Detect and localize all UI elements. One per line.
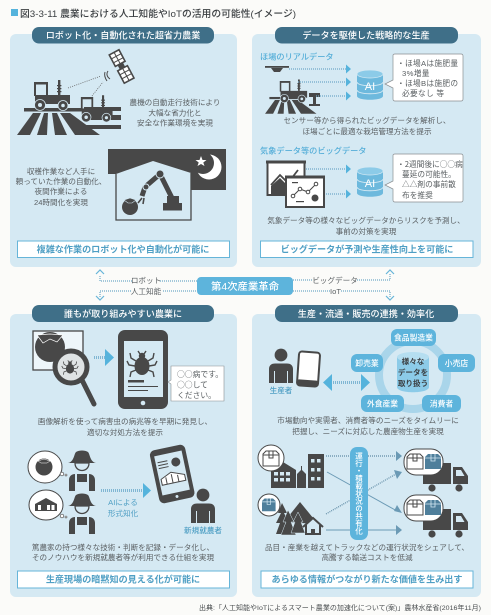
text: weather risk: 気象データ等の様々なビッグデータからリスクを予測し、 (267, 215, 465, 225)
result box: new value: あらゆる情報がつながり新たな価値を生み出す (272, 574, 462, 584)
section heading: weather big data: 気象データ等のビッグデータ (260, 146, 366, 156)
arrow: analysis to phone (94, 349, 114, 366)
icon: data store: 様々な (402, 356, 425, 366)
labels: big data and IoT (312, 275, 358, 296)
labels: big data and IoT: IoT (330, 287, 341, 296)
heading: data production: データを駆使した戦略的な生産 (302, 30, 430, 40)
icon: city buildings with parcel (258, 445, 324, 488)
title: 図3-3-11 農業における人工知能やIoTの活用の可能性(イメージ) (20, 8, 296, 20)
heading: accessible farming (32, 305, 214, 322)
label: industrial revolution pill: 第4次産業革命 (211, 280, 280, 293)
callout: disease forecast: 蔓延の可能性。 (402, 169, 456, 180)
callout: field recommendations: ・ほ場Aは施肥量 (397, 58, 458, 68)
result box: tacit knowledge (18, 571, 230, 588)
node: wholesale: 卸売業 (355, 358, 379, 368)
text: shared logistics (265, 542, 469, 562)
text: know-how: そのノウハウを新規就農者等が利用できる仕組を実現 (32, 552, 214, 562)
arrows: right connector (293, 270, 394, 300)
heading: accessible farming: 誰もが取り組みやすい農業に (64, 308, 182, 319)
text: night-time harvesting: 夜間作業による (35, 186, 87, 196)
labels: big data and IoT: ビッグデータ (312, 275, 358, 285)
arrows: left connector (96, 270, 197, 300)
callout: diagnosis message: ○○病です。 (177, 369, 223, 380)
icon: AI database (357, 70, 383, 100)
icon: data store: 取り扱う (398, 378, 428, 388)
label: AI formalization: 形式知化 (108, 508, 139, 518)
icon: producer with tablet (269, 349, 320, 387)
text: weather risk (267, 215, 465, 236)
icon: smartphone with pest (118, 330, 168, 409)
icon: fields and tractors (17, 80, 121, 135)
center: fourth industrial revolution connector (96, 270, 394, 300)
labels: robot and AI: ロボット (131, 276, 161, 285)
text: image analysis: 適切な対処方法を提示 (87, 427, 163, 437)
text: know-how: 篤農家の持つ様々な技術・判断を記録・データ化し、 (32, 542, 214, 552)
text: market needs: 把握し、ニーズに対応した農産物生産を実現 (292, 426, 444, 436)
text: autonomous machinery: 安全な作業環境を実現 (137, 118, 213, 128)
node: food manufacturing: 食品製造業 (394, 332, 433, 342)
heading: coordination (275, 305, 458, 322)
node: consumers: 消費者 (430, 398, 453, 408)
node: food service: 外食産業 (367, 398, 398, 408)
callout: field recommendations: 3%増量 (402, 68, 430, 78)
callout: disease forecast (385, 154, 463, 202)
icon: truck with parcels (404, 449, 468, 492)
callout: field recommendations: 必要なし 等 (402, 88, 444, 98)
icon: tablet with knowledge (149, 444, 195, 504)
text: autonomous machinery (130, 97, 220, 128)
text: know-how (32, 542, 214, 562)
callout: diagnosis message: ください。 (177, 390, 216, 401)
icon: data store (397, 352, 429, 392)
icon: AI database: AI (365, 81, 375, 93)
callout: diagnosis message (168, 366, 224, 401)
source note: 出典:「人工知能やIoTによるスマート農業の加速化について(案)」農林水産省(2016年11月) (199, 603, 481, 612)
heading: coordination: 生産・流通・販売の連携・効率化 (298, 308, 434, 319)
arrows: logistics links (326, 451, 402, 535)
text: image analysis: 画像解析を使って病害虫の病兆等を早期に発見し、 (38, 416, 212, 426)
icon: AI database: AI (365, 178, 375, 190)
label: shared status pill (350, 447, 368, 540)
panel: accessible farming (10, 305, 237, 597)
heading: robot farming (32, 27, 214, 44)
node: retail: 小売店 (445, 358, 468, 368)
section heading: real field data: ほ場のリアルデータ (260, 52, 334, 62)
text: night-time harvesting: 収穫作業など人手に (27, 166, 95, 176)
labels: robot and AI: 人工知能 (131, 286, 162, 296)
text: shared logistics: 品目・産業を越えてトラックなどの運行状況をシェアして、 (265, 542, 469, 552)
callout: field recommendations (385, 54, 463, 101)
icon: AI database (357, 167, 383, 197)
icon: tomato photo with magnifier (33, 331, 94, 404)
icon: truck with parcels (404, 495, 468, 538)
text: sensor analysis (283, 115, 451, 136)
icon: farmer thinking of greenhouse (29, 490, 96, 534)
text: night-time harvesting: 頼っていた作業の自動化、 (16, 176, 106, 186)
heading: data production (275, 27, 458, 44)
labels: robot and AI (131, 276, 162, 296)
heading: robot farming: ロボット化・自動化された超省力農業 (46, 30, 200, 40)
text: weather risk: 事前の対策を実現 (336, 226, 397, 236)
diagram: supply chain ring (351, 329, 475, 412)
label: AI formalization: AIによる (108, 498, 138, 507)
text: autonomous machinery: 農機の自動走行技術により (130, 97, 220, 107)
arrows: weather data to AI (306, 164, 351, 198)
callout: disease forecast: 布を推奨 (402, 190, 433, 201)
result box: new value (261, 571, 473, 588)
text: sensor analysis: ほ場ごとに最適な栽培管理方法を提示 (302, 126, 432, 136)
arrows: field data to AI (289, 64, 351, 100)
result box: big data: ビッグデータが予測や生産性向上を可能に (281, 244, 453, 254)
text: image analysis (38, 416, 212, 437)
text: market needs (277, 415, 459, 436)
result box: big data (260, 241, 473, 258)
text: market needs: 市場動向や実需者、消費者等のニーズをタイムリーに (277, 415, 459, 425)
result box: robots (18, 241, 230, 258)
arrow: AI formalization (101, 483, 151, 498)
callout: disease forecast: ・2週間後に○○病 (397, 159, 463, 170)
label: shared status pill: 運行・積載状況の共有化 (354, 451, 364, 536)
panel: data-driven strategic production (252, 27, 481, 267)
icon: robot arm in house at night (108, 149, 226, 220)
callout: diagnosis message: ○○して (177, 380, 208, 390)
icon: satellite (105, 50, 134, 83)
text: shared logistics: 高騰する輸送コストを低減 (321, 552, 413, 562)
icon: drone (265, 66, 289, 72)
arrow: two-way link (323, 374, 370, 391)
icon: data store: データを (398, 367, 428, 377)
result box: tacit knowledge: 生産現場の暗黙知の見える化が可能に (46, 574, 200, 584)
callout: disease forecast: △△剤の事前散 (402, 179, 456, 190)
result box: robots: 複雑な作業のロボット化や自動化が可能に (37, 244, 209, 254)
text: night-time harvesting: 24時間化を実現 (34, 197, 88, 207)
signal lines (68, 76, 103, 96)
text: night-time harvesting (16, 166, 106, 207)
callout: field recommendations: ・ほ場Bは施肥の (397, 78, 458, 88)
icon: new farmer (191, 489, 215, 523)
panel: robot and automated farming (10, 27, 237, 267)
icon: farmer thinking of tomato (28, 450, 96, 491)
icon: tractor on field (265, 79, 320, 114)
panel: production distribution sales (252, 305, 481, 597)
label: industrial revolution pill (197, 277, 293, 295)
text: sensor analysis: センサー等から得られたビッグデータを解析し、 (283, 115, 451, 125)
label: AI formalization (108, 498, 139, 518)
icon: mountains forest and house with parcel (258, 494, 323, 535)
label: new farmer: 新規就農者 (184, 525, 222, 535)
icon: weather charts (266, 160, 325, 207)
label: producer: 生産者 (270, 385, 293, 395)
text: autonomous machinery: 大幅な省力化と (148, 108, 202, 118)
